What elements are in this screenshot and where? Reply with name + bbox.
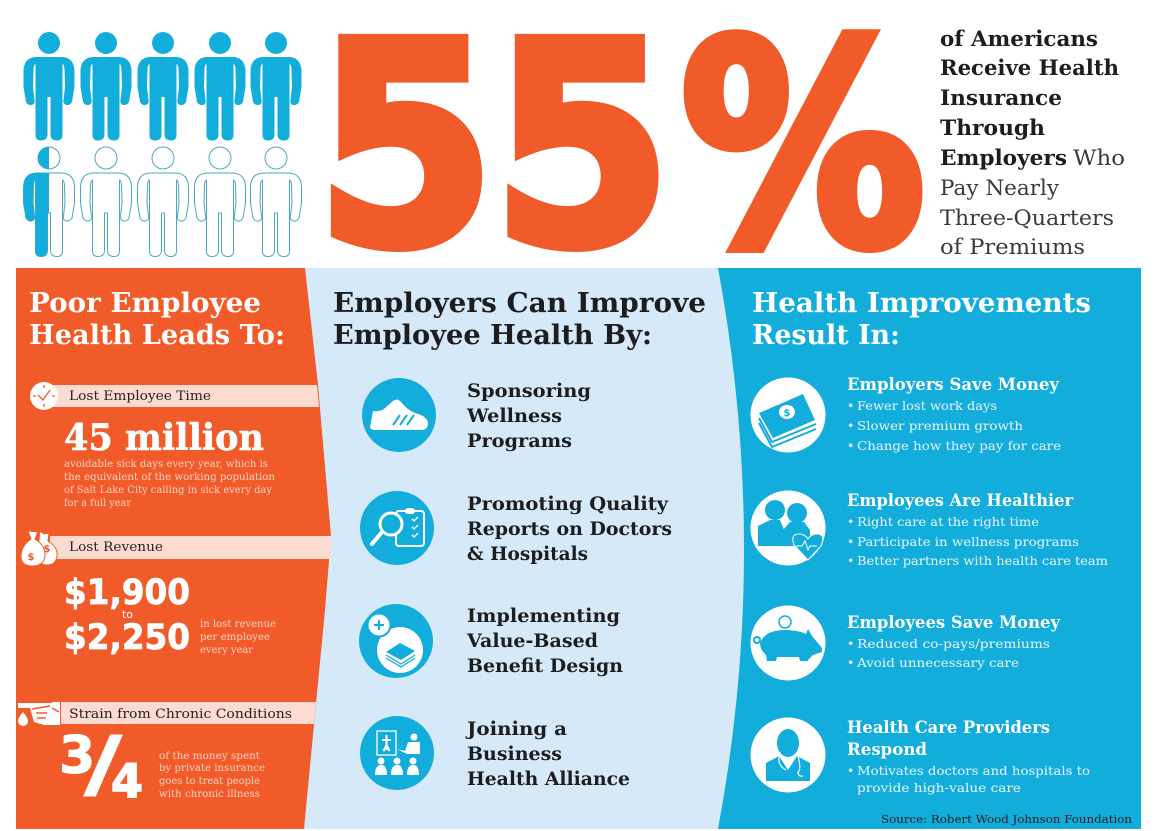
text: joining a business health alliance: Joining a xyxy=(465,718,567,740)
text: chronic illness description: of the money spent xyxy=(159,750,261,762)
text: employees are healthier: Better partners with health care team xyxy=(857,553,1108,568)
text: employers save money: Change how they pay for care xyxy=(857,438,1061,453)
headline text: share of Americans: of Premiums xyxy=(940,235,1085,259)
band: lost employee time xyxy=(50,385,319,407)
text: health care providers respond: Motivates doctors and hospitals to xyxy=(857,763,1090,778)
text: employees are healthier: Employees Are Healthier xyxy=(847,491,1073,510)
text: health care providers respond: provide high-value care xyxy=(857,780,1021,795)
text: sponsoring wellness programs: Sponsoring xyxy=(467,380,591,402)
headline text: share of Americans: Insurance xyxy=(940,85,1062,110)
text: employees save money: Reduced co-pays/premiums xyxy=(857,636,1050,651)
statistic: three quarters: 3 xyxy=(59,726,95,786)
big statistic: 55% xyxy=(316,0,925,310)
text: employees are healthier xyxy=(847,491,1108,568)
panel: poor employee health xyxy=(16,268,331,829)
icon: pointing hand with drop xyxy=(18,702,60,726)
text: employers save money: Slower premium growth xyxy=(857,418,1023,433)
text: sick days description: of Salt Lake City calling in sick every day xyxy=(64,484,272,496)
text: joining a business health alliance: Health Alliance xyxy=(467,768,630,790)
icon: piggy bank xyxy=(750,606,826,680)
statistic: 45 million: 45 million xyxy=(64,417,264,459)
statistic: revenue range: to xyxy=(122,608,133,621)
text: sponsoring wellness programs xyxy=(466,380,591,452)
text: employers save money: Fewer lost work days xyxy=(857,398,997,413)
panel: blue results column background xyxy=(718,268,1141,829)
text: chronic illness description: with chronic illness xyxy=(159,788,260,800)
text: employees save money xyxy=(847,613,1060,670)
band: lost employee time: Lost Employee Time xyxy=(69,389,211,404)
text: employees are healthier: • xyxy=(847,534,854,549)
text: employees save money: Avoid unnecessary care xyxy=(856,655,1019,670)
heading: poor employee health: Poor Employee xyxy=(29,288,261,319)
text: sick days description: the equivalent of the working population xyxy=(64,471,275,483)
text: sponsoring wellness programs: Wellness xyxy=(466,405,562,427)
text: employees save money: Employees Save Money xyxy=(847,613,1060,632)
icon: employees with heart xyxy=(750,490,826,566)
heading: employers can improve: Employee Health By: xyxy=(333,320,652,351)
icon: doctor with stethoscope xyxy=(750,718,826,792)
text: employees are healthier: Participate in wellness programs xyxy=(857,534,1079,549)
source note: Source: Robert Wood Johnson Foundation xyxy=(881,813,1132,826)
icon: row of five filled people xyxy=(24,32,302,140)
text: health care providers respond: • xyxy=(847,763,854,778)
heading: health improvements xyxy=(752,288,1091,351)
text: employers save money: • xyxy=(847,418,854,433)
icon: cash stack: $ xyxy=(784,408,791,419)
heading: employers can improve xyxy=(333,288,706,351)
panel: light blue employers column background xyxy=(300,268,744,829)
icon: magnifier over checklist xyxy=(360,491,434,565)
text: implementing value-based design: Implementing xyxy=(467,605,620,627)
text: chronic illness description: by private insurance xyxy=(159,762,265,774)
icon: shoe xyxy=(362,378,436,452)
statistic: three quarters: / xyxy=(84,721,123,807)
heading: poor employee health: Health Leads To: xyxy=(29,320,285,351)
text: employees are healthier: Right care at the right time xyxy=(857,514,1039,529)
band: strain from chronic conditions: Strain from Chronic Conditions xyxy=(69,707,292,722)
text: employees are healthier: • xyxy=(847,514,854,529)
heading: poor employee health xyxy=(29,288,285,351)
icon: plus and money stack xyxy=(359,604,433,678)
text: health care providers respond: Respond xyxy=(847,740,927,759)
text: health care providers respond: Health Care Providers xyxy=(847,718,1050,737)
statistic: three quarters: 4 xyxy=(111,754,143,808)
headline text: share of Americans: Pay Nearly xyxy=(940,176,1059,200)
text: chronic illness description: goes to treat people xyxy=(159,775,260,787)
text: employers save money: Employers Save Money xyxy=(847,375,1059,394)
icon: money bags xyxy=(21,531,57,566)
statistic: revenue range: $2,250 xyxy=(64,618,190,658)
headline text: share of Americans: Who xyxy=(1073,146,1125,170)
text: lost revenue description: every year xyxy=(200,644,254,656)
heading: health improvements: Health Improvements xyxy=(752,288,1091,319)
text: promoting quality reports: & Hospitals xyxy=(467,543,588,565)
text: employees save money: • xyxy=(847,636,854,651)
icon: row of outlined people with one half filled xyxy=(24,147,302,256)
text: employees are healthier: • xyxy=(847,553,854,568)
icon: money bags: $ xyxy=(28,552,35,563)
text: implementing value-based design: Benefit Design xyxy=(467,655,623,677)
text: sick days description: for a full year xyxy=(64,497,132,509)
band: lost revenue xyxy=(50,536,331,559)
icon: money bags: $ xyxy=(44,544,51,555)
heading: employers can improve: Employers Can Improve xyxy=(333,288,706,319)
text: promoting quality reports xyxy=(467,493,672,565)
icon: cash stack xyxy=(750,378,826,452)
text: employers save money: • xyxy=(847,438,854,453)
text: employers save money: • xyxy=(847,398,854,413)
icon: clock xyxy=(30,382,58,410)
text: lost revenue description: per employee xyxy=(200,631,270,643)
statistic: revenue range: $1,900 xyxy=(64,573,190,613)
headline text: share of Americans xyxy=(940,26,1125,259)
headline text: share of Americans: Receive Health xyxy=(940,55,1119,80)
text: promoting quality reports: Reports on Doctors xyxy=(467,518,672,540)
text: employees save money: • xyxy=(847,655,854,670)
headline text: share of Americans: Through xyxy=(940,115,1045,140)
statistic: revenue range xyxy=(64,573,190,658)
text: sick days description: avoidable sick days every year, which is xyxy=(64,458,268,470)
headline text: share of Americans: Employers xyxy=(940,145,1067,170)
text: sick days description xyxy=(64,458,275,509)
text: promoting quality reports: Promoting Quality xyxy=(467,493,669,515)
text: lost revenue description: in lost revenue xyxy=(200,618,276,630)
headline text: share of Americans: Three-Quarters xyxy=(940,206,1114,230)
headline text: share of Americans: of Americans xyxy=(940,26,1098,51)
heading: health improvements: Result In: xyxy=(752,320,900,351)
text: employers save money xyxy=(847,375,1061,453)
text: chronic illness description xyxy=(159,750,265,800)
text: implementing value-based design xyxy=(466,605,623,677)
text: implementing value-based design: Value-Based xyxy=(466,630,598,652)
text: joining a business health alliance: Business xyxy=(467,743,562,765)
text: health care providers respond xyxy=(847,718,1090,795)
band: lost revenue: Lost Revenue xyxy=(69,540,163,555)
band: strain from chronic conditions xyxy=(61,702,316,724)
statistic: three quarters xyxy=(59,721,143,808)
icon: presenter and audience xyxy=(360,716,434,790)
text: joining a business health alliance xyxy=(465,718,630,790)
text: sponsoring wellness programs: Programs xyxy=(467,430,572,452)
text: lost revenue description xyxy=(200,618,276,656)
